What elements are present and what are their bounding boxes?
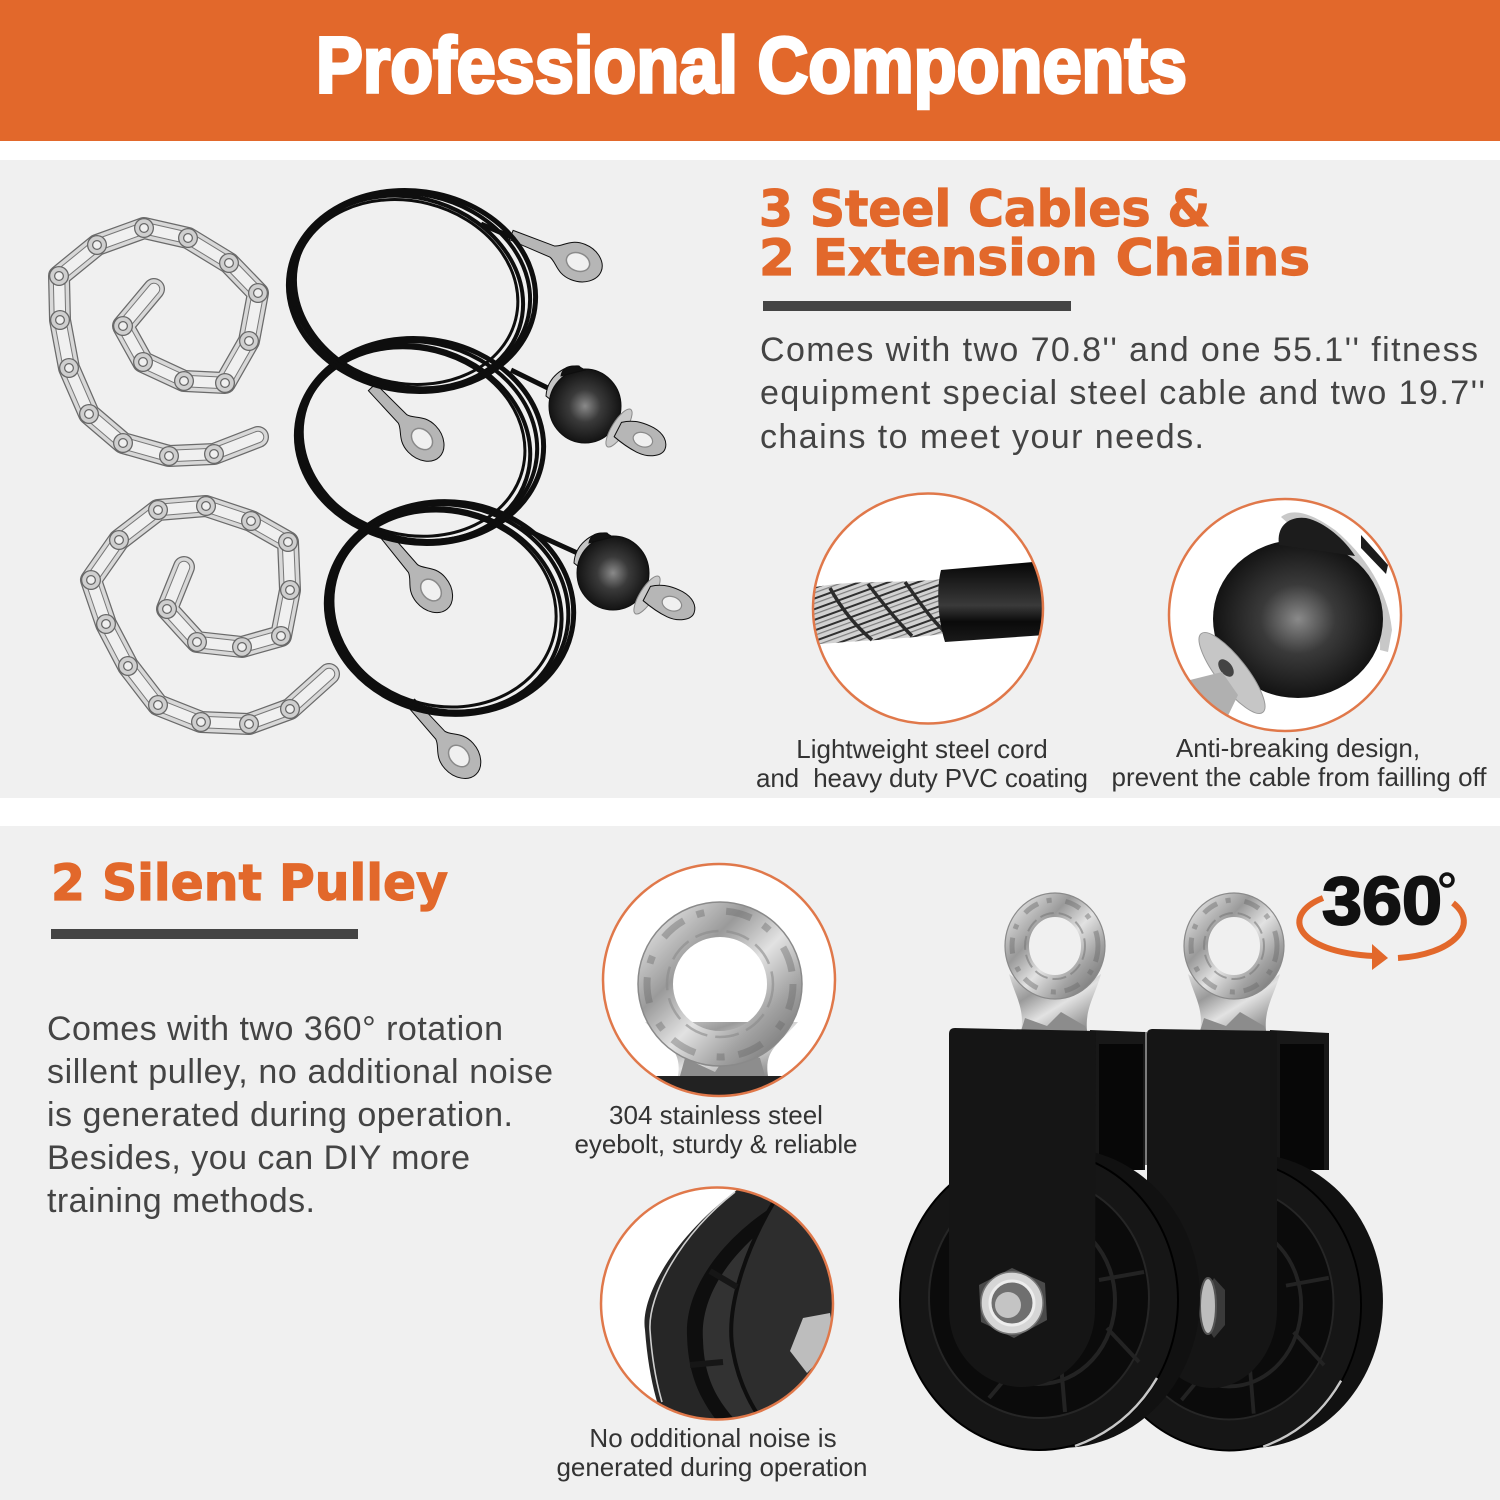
cable 3 [306, 479, 700, 787]
heading underline [51, 929, 358, 939]
description: pulley [47, 1010, 553, 1220]
rotation arrow [1299, 898, 1464, 970]
heading: silent pulley: 2 Silent Pulley [51, 854, 448, 912]
heading: steel cables: 3 Steel Cables & [759, 180, 1210, 238]
caption: silent wheel [556, 1423, 868, 1482]
description: pulley: is generated during operation. [47, 1096, 513, 1134]
description: pulley: Besides, you can DIY more [47, 1139, 470, 1177]
pulley right [1097, 893, 1383, 1450]
heading: steel cables: 2 Extension Chains [759, 229, 1310, 287]
chain 2 [91, 506, 329, 724]
pulley left [900, 893, 1200, 1450]
caption: silent wheel: No odditional noise is [589, 1423, 837, 1453]
heading: steel cables [759, 180, 1310, 287]
heading underline [763, 301, 1071, 311]
description: pulley: training methods. [47, 1182, 315, 1220]
detail circle: steel cord [810, 494, 1045, 724]
chain 1 [59, 228, 258, 456]
caption: anti-breaking: Anti-breaking design, [1176, 733, 1420, 763]
360 label: 360 [1322, 863, 1442, 939]
panel: cables and chains [0, 160, 1500, 798]
panel: silent pulley [0, 826, 1500, 1500]
caption: anti-breaking [1112, 733, 1487, 792]
cable 1 [270, 167, 671, 470]
title: Professional Components [316, 20, 1187, 109]
cable 2 [276, 316, 557, 621]
eyebolt left [1005, 893, 1105, 1031]
caption: eyebolt: eyebolt, sturdy & reliable [574, 1129, 858, 1159]
detail circle: anti-breaking ball [1169, 499, 1401, 731]
description: pulley: sillent pulley, no additional noise [47, 1053, 553, 1091]
detail circle: silent wheel [601, 1188, 840, 1425]
description: cables [760, 331, 1485, 456]
description: cables: chains to meet your needs. [760, 418, 1204, 456]
caption: steel cord [756, 734, 1088, 793]
caption: steel cord: and heavy duty PVC coating [756, 763, 1088, 793]
360 rotation badge [1299, 863, 1464, 970]
bolt [979, 1268, 1047, 1338]
caption: anti-breaking: prevent the cable from failling off [1112, 762, 1487, 792]
caption: silent wheel: generated during operation [556, 1452, 868, 1482]
caption: eyebolt [574, 1100, 858, 1159]
caption: steel cord: Lightweight steel cord [796, 734, 1048, 764]
detail circle: eyebolt [603, 864, 835, 1100]
description: cables: Comes with two 70.8'' and one 55.1'' fitness [760, 331, 1478, 369]
degree mark [1441, 874, 1453, 886]
description: pulley: Comes with two 360° rotation [47, 1010, 503, 1048]
caption: eyebolt: 304 stainless steel [609, 1100, 823, 1130]
eyebolt right [1184, 893, 1284, 1031]
description: cables: equipment special steel cable and two 19.7'' [760, 374, 1485, 412]
header band [0, 0, 1500, 141]
